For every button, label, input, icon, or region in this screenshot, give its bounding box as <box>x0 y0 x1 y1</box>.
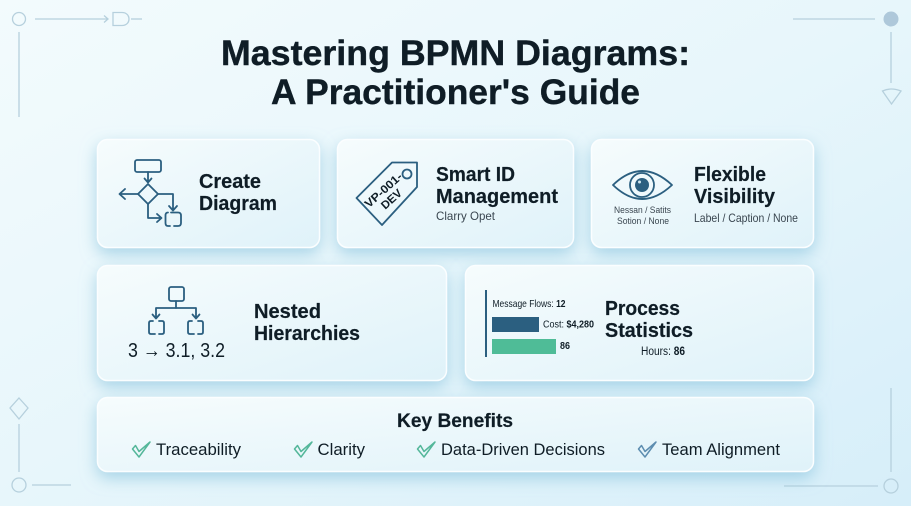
caption: Clarry Opet <box>436 209 496 223</box>
hours stat: Hours: 86 <box>641 346 685 358</box>
icon caption: Sotion / None <box>617 216 669 226</box>
heading: create diagram <box>199 170 277 215</box>
bar chart: 86 <box>560 340 570 352</box>
benefit: data-driven decisions: Data-Driven Decisions <box>441 441 605 459</box>
heading: flexible visibility: Visibility <box>694 185 776 208</box>
title: A Practitioner's Guide <box>271 73 640 112</box>
heading: nested hierarchies <box>254 300 360 345</box>
heading: create diagram: Diagram <box>199 192 277 215</box>
icon: id tag: VP-001- <box>363 171 405 211</box>
benefit: clarity <box>294 441 366 459</box>
panel: create diagram <box>98 140 320 248</box>
title <box>221 34 690 112</box>
heading: create diagram: Create <box>199 170 261 193</box>
heading: smart id management <box>436 163 558 208</box>
heading: process statistics: Statistics <box>605 319 693 342</box>
benefit: traceability: Traceability <box>156 441 242 459</box>
benefit: clarity: Clarity <box>318 441 366 459</box>
decoration: bottom-left flow <box>10 398 71 492</box>
icon: id tag <box>356 162 417 225</box>
decoration: top-left flow <box>12 12 142 117</box>
heading: process statistics <box>605 297 693 342</box>
bar chart: Message Flows: 12 <box>492 298 566 310</box>
icon: hierarchy <box>149 287 203 334</box>
heading: process statistics: Process <box>605 297 680 320</box>
title: Mastering BPMN Diagrams: <box>221 34 690 73</box>
heading: key benefits: Key Benefits <box>397 411 513 432</box>
panel: smart id management <box>338 140 574 248</box>
numbering text: 3 → 3.1, 3.2 <box>128 340 225 362</box>
panel: flexible visibility <box>592 140 814 248</box>
bar chart <box>485 290 594 357</box>
heading: nested hierarchies: Hierarchies <box>254 322 360 345</box>
icon: id tag: DEV <box>379 187 405 212</box>
heading: flexible visibility <box>694 163 776 208</box>
heading: nested hierarchies: Nested <box>254 300 321 323</box>
heading: smart id management: Smart ID <box>436 163 515 186</box>
bar chart: Cost: $4,280 <box>543 318 594 330</box>
decoration: top-right flow <box>793 12 901 104</box>
icon caption <box>614 205 671 226</box>
heading: smart id management: Management <box>436 185 558 208</box>
caption: Label / Caption / None <box>694 211 798 225</box>
decoration: bottom-right flow <box>784 388 898 493</box>
icon: flowchart <box>120 160 181 226</box>
icon caption: Nessan / Satits <box>614 205 671 215</box>
panel: nested hierarchies <box>98 266 446 380</box>
benefit: team alignment: Team Alignment <box>662 441 780 459</box>
panel: process statistics <box>466 266 814 380</box>
heading: flexible visibility: Flexible <box>694 163 766 186</box>
panel: key benefits <box>98 398 814 472</box>
icon: eye <box>613 171 672 199</box>
